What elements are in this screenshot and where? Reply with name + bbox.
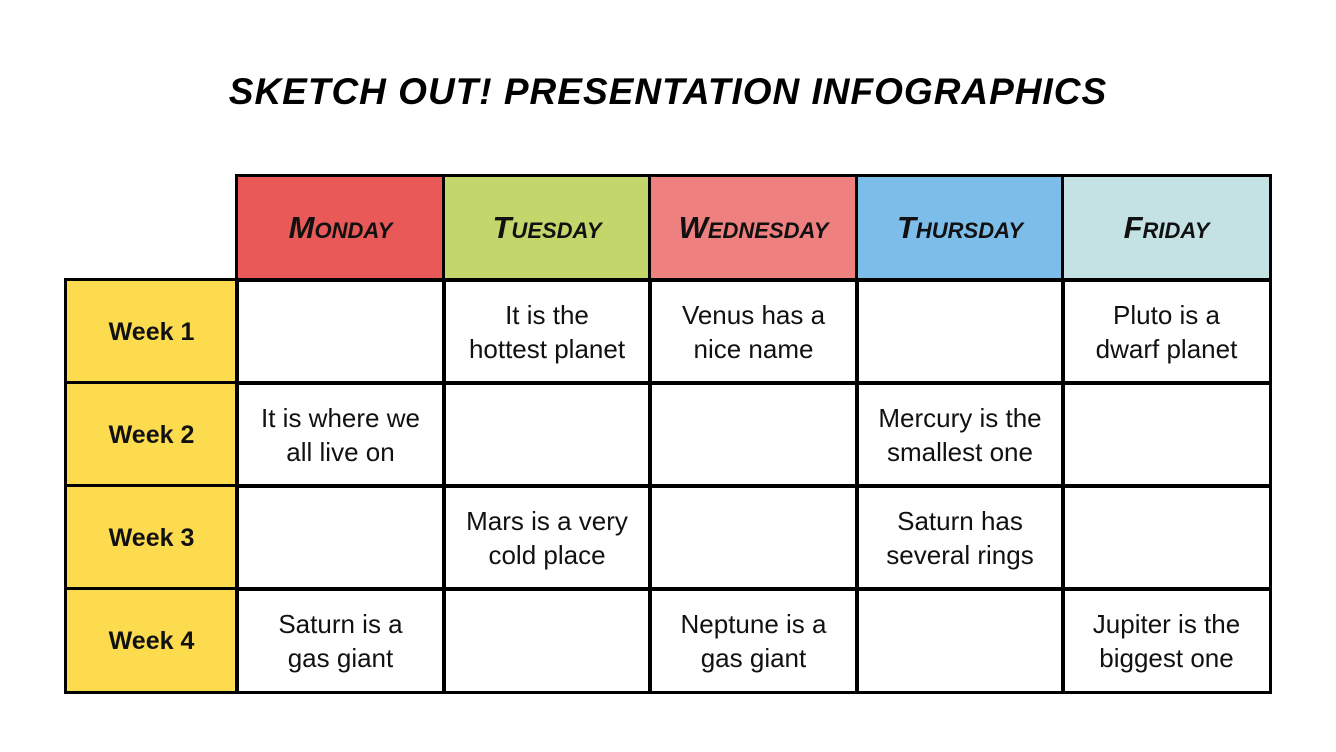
cell: Saturn gas giant: gas giant — [288, 642, 393, 672]
empty cell — [442, 381, 652, 488]
cell: Mercury — [855, 381, 1065, 488]
cell: Neptune: Neptune is a — [680, 608, 826, 638]
cell: Neptune: gas giant — [701, 642, 806, 672]
cell: Mars: Mars is a very — [466, 506, 628, 536]
cell: Saturn rings: several rings — [886, 540, 1034, 570]
empty cell — [1061, 484, 1272, 591]
cell: Earth — [235, 381, 446, 488]
empty cell — [235, 484, 446, 591]
cell: hottest planet — [442, 278, 652, 385]
cell: Mars: cold place — [488, 540, 606, 570]
header: Monday: Monday — [289, 210, 392, 245]
cell: Mercury: Mercury is the — [878, 402, 1042, 432]
cell: Jupiter: biggest one — [1099, 642, 1234, 672]
week 3: Week 3 — [109, 524, 194, 552]
empty cell — [855, 278, 1065, 385]
header: Tuesday: Tuesday — [492, 210, 602, 245]
cell: Earth: It is where we — [261, 402, 420, 432]
empty cell — [235, 278, 446, 385]
cell: Pluto — [1061, 278, 1272, 385]
cell: hottest planet: hottest planet — [469, 334, 625, 364]
empty cell — [648, 381, 859, 488]
week 4 — [64, 587, 239, 694]
header: Thursday: Thursday — [897, 210, 1023, 245]
cell: Saturn rings: Saturn has — [897, 506, 1023, 536]
cell: Pluto: dwarf planet — [1096, 334, 1237, 364]
header: Friday — [1061, 174, 1272, 282]
empty cell — [648, 484, 859, 591]
cell: hottest planet: It is the — [505, 300, 589, 330]
header: Monday — [235, 174, 446, 282]
week 4: Week 4 — [109, 626, 194, 654]
empty cell — [855, 587, 1065, 694]
cell: Jupiter — [1061, 587, 1272, 694]
cell: Jupiter: Jupiter is the — [1093, 608, 1240, 638]
header: Tuesday — [442, 174, 652, 282]
cell: Venus: Venus has a — [682, 300, 825, 330]
cell: Saturn gas giant — [235, 587, 446, 694]
header: Wednesday: Wednesday — [679, 210, 828, 245]
header: Thursday — [855, 174, 1065, 282]
week 2: Week 2 — [109, 420, 194, 448]
cell: Saturn gas giant: Saturn is a — [278, 608, 403, 638]
cell: Venus — [648, 278, 859, 385]
cell: Neptune — [648, 587, 859, 694]
week 1: Week 1 — [109, 318, 194, 346]
week 2 — [64, 381, 239, 488]
header: Friday: Friday — [1124, 210, 1209, 245]
empty cell — [442, 587, 652, 694]
cell: Earth: all live on — [286, 436, 395, 466]
header: Wednesday — [648, 174, 859, 282]
week 1 — [64, 278, 239, 385]
cell: Saturn rings — [855, 484, 1065, 591]
cell: Mars — [442, 484, 652, 591]
week 3 — [64, 484, 239, 591]
empty cell — [1061, 381, 1272, 488]
cell: Mercury: smallest one — [887, 436, 1033, 466]
cell: Pluto: Pluto is a — [1113, 300, 1220, 330]
cell: Venus: nice name — [694, 334, 813, 364]
title: SKETCH OUT! PRESENTATION INFOGRAPHICS — [229, 71, 1107, 112]
